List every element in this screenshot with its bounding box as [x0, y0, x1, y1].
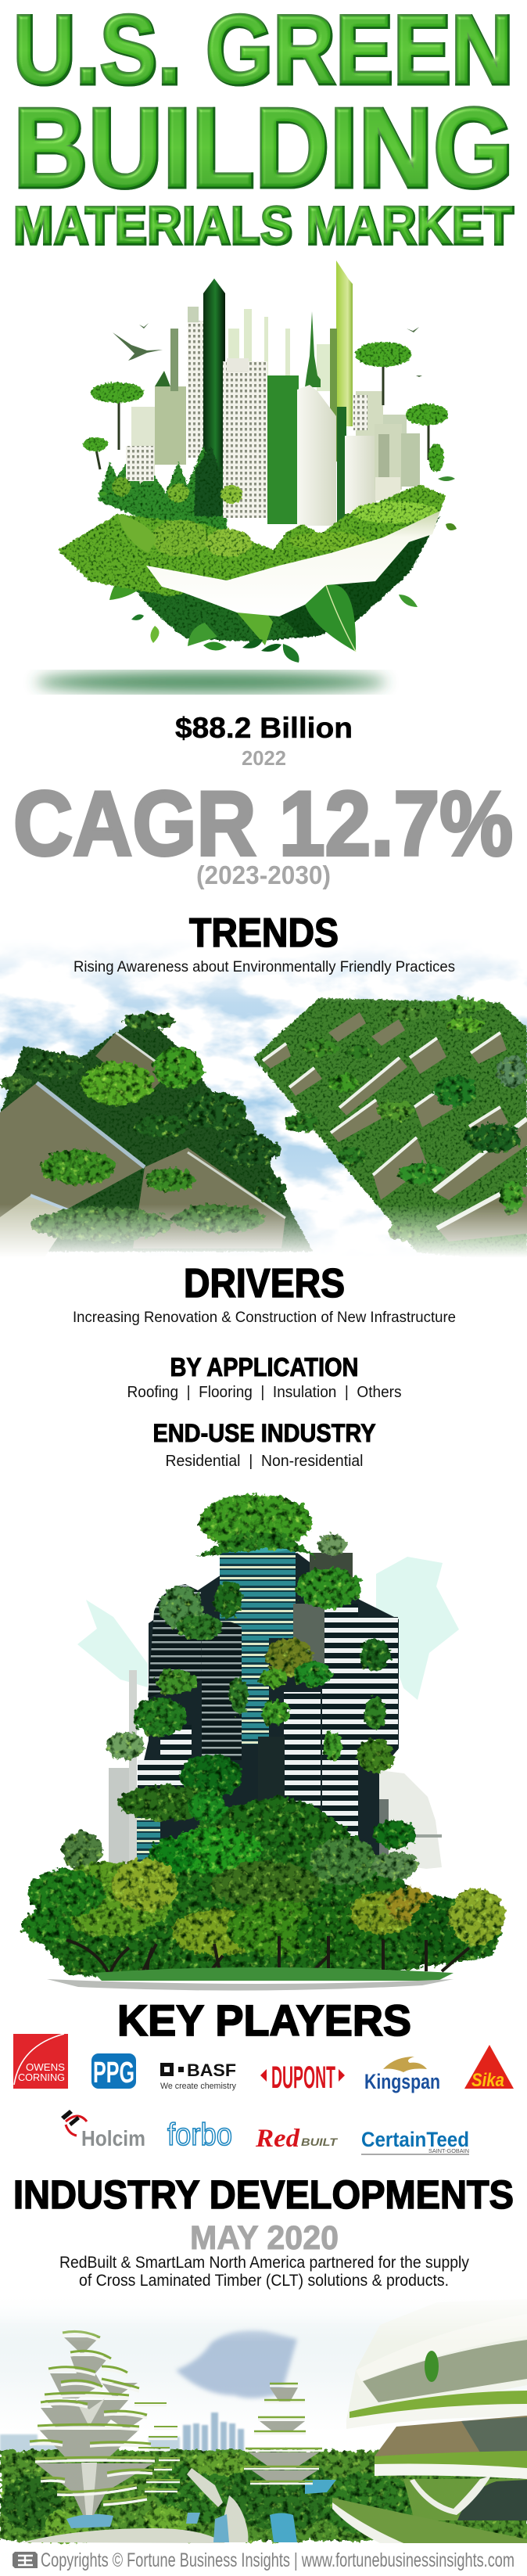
ground shadow: [35, 672, 387, 692]
middle terraced tower: [244, 2384, 322, 2484]
front towers: [126, 358, 420, 526]
logo: Owens Corning: CORNING: [18, 2071, 65, 2083]
rear stripe blocks: [148, 1553, 398, 1750]
upper tree crowns: [106, 1493, 394, 1773]
logo: RedBuilt: Red: [255, 2125, 300, 2153]
trend description: Rising Awareness about Environmentally Friendly Practices: [73, 959, 455, 975]
understory buildings: [133, 1946, 407, 1974]
logo: Kingspan: Kingspan: [364, 2070, 440, 2093]
development date: MAY 2020: [190, 2219, 339, 2257]
heading: drivers: DRIVERS: [184, 1261, 345, 1306]
logo: PPG: PPG: [93, 2057, 134, 2089]
footer logo: [13, 2552, 38, 2568]
end-use list: Residential | Non-residential: [166, 1453, 363, 1470]
sky: [0, 950, 527, 1245]
logo: Sika: [464, 2045, 514, 2091]
pale mint brush shapes: [77, 1557, 459, 1700]
logo: Sika: Sika: [471, 2070, 504, 2091]
clouds: [0, 935, 527, 1263]
logo: PPG: [91, 2053, 136, 2089]
logo: CertainTeed: CertainTeed: [361, 2128, 469, 2151]
description line 1: RedBuilt & SmartLam North America partnered for the supply: [59, 2254, 469, 2272]
illustration: green city on floating island: [35, 260, 457, 692]
logo: Owens Corning: OWENS: [26, 2061, 65, 2073]
forecast period: (2023-2030): [196, 860, 331, 889]
market size value: $88.2 Billion: [175, 712, 353, 744]
logo: Forbo: forbo: [167, 2118, 232, 2152]
driver description: Increasing Renovation & Construction of New Infrastructure: [73, 1310, 456, 1326]
distant cloud: [176, 2330, 297, 2398]
left terraced tower: [30, 2331, 180, 2515]
logo: Owens Corning: [13, 2034, 68, 2089]
left building panels: [0, 1033, 285, 1259]
heading: key players: KEY PLAYERS: [117, 1996, 411, 2045]
base year: 2022: [242, 746, 286, 770]
top fade: [0, 2295, 527, 2342]
distant skyline: [0, 2413, 244, 2454]
logo: RedBuilt: BUILT: [301, 2136, 339, 2148]
logo: Holcim: Holcim: [81, 2126, 145, 2150]
forest floor: [0, 2450, 527, 2544]
birds: [113, 323, 422, 377]
title: [13, 0, 514, 256]
heading: trends: TRENDS: [189, 911, 339, 956]
right building balconies: [263, 1012, 527, 1241]
left building mass: [0, 1015, 313, 1252]
right building white edges: [263, 1033, 527, 1228]
illustration: green skyscraper with trees: [22, 1493, 505, 1991]
heading: end-use industry: END-USE INDUSTRY: [153, 1419, 375, 1447]
right building foliage: [284, 998, 527, 1240]
logo: Kingspan: [364, 2057, 440, 2093]
lower dark foliage under island: [129, 516, 440, 641]
photo: futuristic green city: [0, 2295, 527, 2544]
leaves around island: [94, 476, 457, 663]
logo: Holcim: [61, 2110, 145, 2150]
big leaf on grass: [117, 514, 156, 553]
application list: Roofing | Flooring | Insulation | Others: [127, 1384, 402, 1401]
bushes behind front towers: [98, 446, 227, 532]
road and water: [22, 2468, 336, 2543]
left and back towers: [131, 260, 407, 524]
logo: BASF: BASF: [187, 2060, 236, 2080]
development description: [59, 2254, 469, 2290]
paper cross-section: [146, 511, 440, 616]
tree canopies: [83, 342, 448, 472]
logo: BASF: We create chemistry: [160, 2082, 236, 2091]
left building foliage: [0, 1012, 285, 1241]
description line 2: of Cross Laminated Timber (CLT) solutions & products.: [79, 2272, 449, 2290]
trunks and grass: [47, 1936, 469, 1991]
central cylinder: [220, 1539, 296, 1744]
logo: DuPont: [260, 2060, 345, 2095]
heading: by application: BY APPLICATION: [170, 1353, 358, 1381]
mid stripe blocks: [137, 1604, 358, 1866]
logo: DuPont: DUPONT: [271, 2060, 335, 2095]
right building body: [253, 998, 527, 1263]
photo: vertical forest towers: [0, 935, 527, 1263]
right curved building: [332, 2299, 527, 2543]
logo: RedBuilt: [255, 2125, 339, 2153]
sky: [0, 2295, 527, 2543]
lower tree mass: [22, 1754, 505, 1976]
island grass top: [58, 477, 446, 596]
logo: CertainTeed: SAINT-GOBAIN: [428, 2149, 469, 2154]
tree trunks: [95, 358, 428, 469]
logo: BASF: [160, 2060, 236, 2091]
dark building core: [138, 1553, 399, 1858]
footer: [13, 2549, 514, 2571]
side pale buildings: [109, 1670, 442, 1869]
far pale towers: [228, 309, 334, 391]
